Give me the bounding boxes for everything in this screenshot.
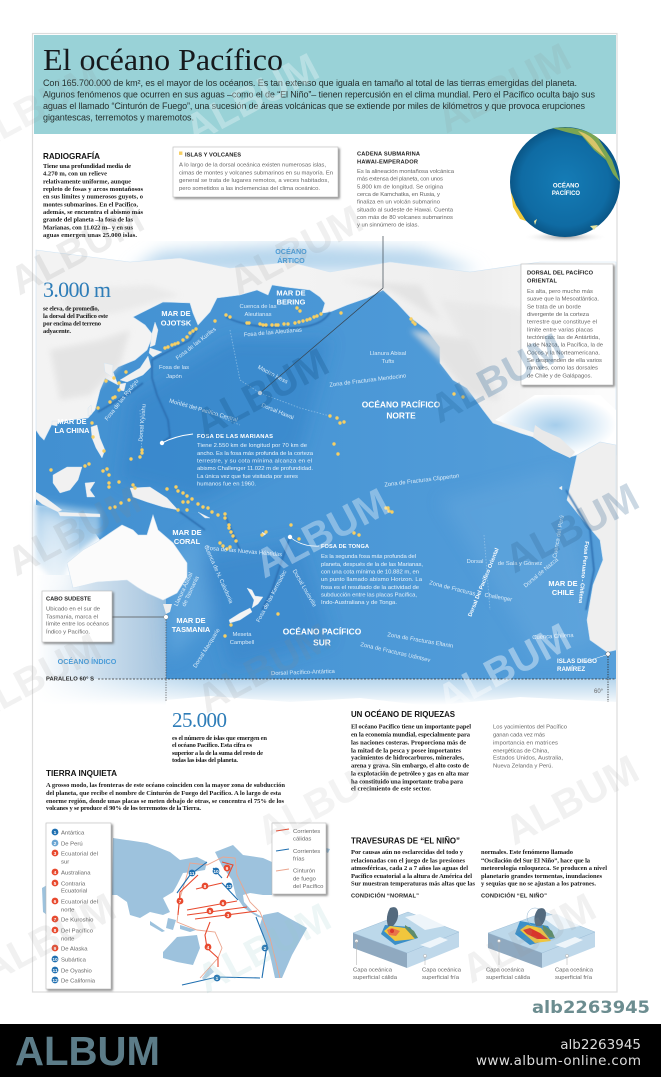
sea and ocean names [54,247,597,673]
text: Travesuras de El Niño: Por causas aún no esclarecidas del todo y [351,849,464,856]
album watermarks: ALBUM [248,480,396,587]
cold currents [177,862,267,985]
diagram: condición normal [351,892,462,981]
callout: Cabo Sudeste: CABO SUDESTE [46,596,91,602]
seabed feature labels: Zona de Fracturas Udintsev [360,642,431,664]
album watermarks: ALBUM [190,895,338,1002]
intro text: Con 165.700.000 de km², es el mayor de los océanos. Es tan extenso que iguala en tamaño al total de las tierras emergidas del planeta. [43,78,577,88]
text: Un océano de riquezas: en la economía mundial, especialmente para [351,731,471,738]
legend: current types: Cinturón [293,868,315,874]
text: Un océano de riquezas: la explotación de petróleo y gas en alta mar [351,770,469,777]
footer logo: ALBUM [15,1028,160,1074]
callout: Fosa de Tonga: FOSA DE TONGA [321,544,369,550]
seabed feature labels: Dorsal Kyushu [138,404,148,442]
stat: 3.000 m [43,277,111,335]
text: Tierra inquieta: TIERRA INQUIETA [46,768,117,778]
legend: current numbers: 4 [54,870,57,876]
callout: Islas y volcanes: pero sometidos a las inclemencias del clima oceánico. [179,186,320,192]
text: Radiografía: repleto de fosas y arcos montañosos [43,186,143,193]
text: Un océano de riquezas: las naciones costeras. Proporciona más de [351,739,466,746]
sea and ocean names: MAR DE [57,417,87,426]
text: Radiografía: Tiene una profundidad media de [43,163,131,170]
stat: 25.000 [172,708,267,764]
stat: 3.000 m: se eleva, de promedio, [43,306,99,312]
seabed feature labels: Llanura Abisal [370,351,406,357]
legend: current types: de fuego [293,876,317,882]
seabed feature labels: de Sala y Gómez [498,561,542,567]
text: Travesuras de El Niño: meteorología enloquezca. Se producen a nivel [481,865,607,872]
text: Un océano de riquezas: UN OCÉANO DE RIQUEZAS [351,709,455,719]
current numbers on map: 7 [179,899,182,905]
text: Un océano de riquezas: yacimientos de hidrocarburos, minerales, [351,754,464,761]
text: Cadena submarina Hawai-Emperador: Es la alineación montañosa volcánica [357,169,455,175]
text: Un océano de riquezas [351,709,568,792]
text: Travesuras de El Niño: Pacífico ecuatorial a la altura de América del [351,873,472,880]
text: Tierra inquieta: del planeta, que recibe el nombre de Cinturón de Fuego del Pacífico. A lo largo de esta [46,790,282,797]
seabed feature labels: Dorsal Louisville [291,569,317,608]
sea and ocean names: NORTE [386,410,416,420]
sea and ocean names: BERING [277,298,306,306]
text: Un océano de riquezas: la mitad de la pesca y posee importantes [351,747,461,754]
text: Un océano de riquezas: Nueva Zelanda y Perú. [493,763,553,769]
callout: Fosa de las Marianas: terrestre, y su cota mínima alcanza en el [197,458,312,464]
islands and land of the west Pacific [36,322,562,536]
text: Travesuras de El Niño: y sequías que no se ajustan a los patrones. [481,880,596,887]
legend: current numbers: 8 [54,928,57,934]
legend: current numbers: 6 [54,899,57,905]
album watermarks: ALBUM [498,475,646,582]
seabed feature labels: Meseta [232,632,252,638]
legend: current numbers: 9 [54,946,57,952]
callout: Islas y volcanes: general se trata de lugares remotos, a veces habitados, [179,178,329,184]
callout: Dorsal del Pacífico Oriental: terrestre que constituye el [527,320,597,326]
current numbers on map: 1 [216,976,219,982]
stat: 25.000: superior a la de la suma del resto de [172,750,263,757]
callout: Dorsal del Pacífico Oriental: ramales, como las dorsales [527,366,598,372]
callout: Islas y volcanes [173,147,338,197]
parallel 60 S marker [46,617,616,702]
stat: 3.000 m: la dorsal del Pacífico este [43,313,108,320]
seabed feature labels: Fosa Peruano - Chilena [577,541,589,604]
seabed feature labels: Fosa de las Kermadec [256,569,288,624]
text: Un océano de riquezas: Los yacimientos del Pacífico [493,724,568,730]
seabed feature labels: Campbell [230,640,254,646]
legend: current types: Corrientes [293,849,320,855]
legend: current numbers: 11 [52,968,58,974]
callout: Dorsal del Pacífico Oriental: Se trata de un borde [527,304,582,310]
text: Cadena submarina Hawai-Emperador: HAWAI-EMPERADOR [357,160,418,166]
footer credits: www.album-online.com [476,1053,641,1069]
diagram: condición El Niño: CONDICIÓN “EL NIÑO” [481,892,547,900]
globe icon: PACÍFICO [552,189,580,197]
diagram: condición El Niño [481,892,595,981]
legend: current numbers: 10 [52,957,58,963]
seabed feature labels: Dorsal Macquarie [193,628,222,669]
sea and ocean names: LA CHINA [54,426,90,435]
New Zealand [229,588,263,623]
sea and ocean names: OJOTSK [161,318,192,328]
text: Un océano de riquezas: El océano Pacífico tiene un importante papel [351,723,471,730]
text: Radiografía: relativamente uniforme, aunque [43,178,131,186]
sea and ocean names: ÁRTICO [277,256,305,265]
parallel 60 S marker: 60° [594,689,604,695]
album watermarks: ALBUM [222,197,370,304]
legend: current types: Corrientes [293,829,320,835]
seabed feature labels: Dorsal [467,559,483,565]
seabed feature labels: de Tasmania [181,575,201,608]
album watermarks: ALBUM [430,35,578,142]
callout: Fosa de las Marianas: FOSA DE LAS MARIANAS [197,434,273,440]
text: Un océano de riquezas: arena y grava. Sin embargo, el alto costo de [351,762,469,769]
stat: 3.000 m: 3.000 m [43,277,111,302]
album watermarks: ALBUM [188,340,336,447]
intro text: Algunos fenómenos que ocurren en sus aguas –como el de “El Niño”– tienen repercusión en el clima mundial. Pero el Pacífico oculta bajo sus [43,90,596,100]
text: Radiografía: aguas emergen unas 25.000 islas. [43,232,137,239]
callout: Cabo Sudeste: Ubicado en el sur de [46,606,101,612]
text: Un océano de riquezas: energéticas de China, [493,748,549,754]
diagram: condición normal: superficial fría [422,975,460,981]
text: Cadena submarina Hawai-Emperador: con más de 80 volcanes submarinos [357,215,453,221]
text: Radiografía [43,150,143,239]
ocean trenches [98,312,594,610]
parallel 60 S marker: PARALELO 60° S [46,676,94,682]
callout: Dorsal del Pacífico Oriental: suave que la Mesoatlántica. [527,296,599,302]
callout: Cabo Sudeste: límite entre los océanos [46,622,109,628]
seabed feature labels: Fosa de las Ryukyu [104,378,140,422]
callout: Dorsal del Pacífico Oriental [521,264,613,385]
callout: Dorsal del Pacífico Oriental: Cocos y la Norteamericana. [527,350,600,356]
text: Cadena submarina Hawai-Emperador [357,152,455,228]
legend: current types: del Pacífico [293,884,324,890]
text: Travesuras de El Niño: relacionadas con el juego de las presiones [351,857,465,864]
callout: Cabo Sudeste [42,591,168,642]
sea and ocean names: MAR DE [172,528,202,537]
yellow dots: islands and volcanoes [49,306,465,638]
text: Travesuras de El Niño: “Oscilación del Sur El Niño”, hace que la [481,857,591,864]
sea and ocean names: ISLAS DIEGO [557,658,597,665]
seabed feature labels: Tufts [382,359,394,365]
sea and ocean names: MAR DE [161,309,191,318]
seabed feature labels: Dorsal Hawai [260,403,294,421]
current numbers on map: 8 [204,884,207,890]
callout: Dorsal del Pacífico Oriental: de Chile y de Galápagos. [527,374,592,380]
album watermarks: ALBUM [0,478,148,585]
current numbers on map: 12 [226,884,232,890]
sea and ocean names: RAMÍREZ [557,665,585,673]
text: Radiografía: Marianas, con 11.022 m– y en sus [43,224,133,232]
diagram: condición normal: Capa oceánica [353,968,393,974]
text: Un océano de riquezas: el crecimiento de este sector. [351,785,431,792]
stat: 25.000: es el número de islas que emergen en [172,735,267,742]
diagram: condición normal: CONDICIÓN “NORMAL” [351,892,419,900]
intro text: aguas el llamado “Cinturón de Fuego”, una sucesión de áreas volcánicas que se extiende por miles de kilómetros y que provoca erupciones [43,101,586,111]
callout: Fosa de las Marianas [160,434,314,488]
current numbers on map: 5 [209,909,212,915]
current numbers on map: 3 [227,913,230,919]
current numbers on map: 10 [213,869,219,875]
sea and ocean names: MAR DE [548,579,578,588]
legend: current numbers: Ecuatorial [61,888,87,894]
seabed feature labels: Fosa de las Aleutianas [244,327,302,339]
seabed feature labels [104,304,589,677]
footer credits: alb2263945 [560,1037,641,1053]
seabed feature labels: Macizo Hess [256,365,289,386]
seabed feature labels: Fosa de las Nuevas Hébridas [206,546,282,558]
legend: current numbers: 12 [52,978,58,984]
diagram: condición El Niño: superficial fría [555,975,593,981]
ring of fire [177,857,280,978]
legend: current numbers: 1 [54,830,57,836]
Australia [67,515,187,600]
callout: Dorsal del Pacífico Oriental: la de Nazca, la Pacífica, la de [527,342,604,348]
stat: 3.000 m: adyacente. [43,328,71,335]
text: Cadena submarina Hawai-Emperador: y un sinnúmero de islas. [357,222,419,228]
callout: Fosa de Tonga [288,535,423,606]
seabed feature labels: Montes del Pacífico Central [168,398,238,424]
text: Un océano de riquezas: ganan cada vez más [493,732,545,738]
text: Un océano de riquezas: importancia en matrices [493,740,558,746]
album watermarks: ALBUM [250,747,398,854]
text: Radiografía: RADIOGRAFÍA [43,150,100,161]
legend: current numbers [46,823,111,989]
sea and ocean names: OCÉANO ÍNDICO [58,657,117,666]
title: El océano Pacífico [43,42,283,77]
sea and ocean names: OCÉANO [275,247,307,256]
text: Un océano de riquezas: Estados Unidos, Australia, [493,755,563,761]
callout: Cabo Sudeste: Índico y Pacífico. [46,628,90,636]
diagram: condición normal: superficial cálida [353,975,398,981]
sea and ocean names: OCÉANO PACÍFICO [362,398,441,410]
continents [42,838,330,980]
footer bar [0,1024,661,1077]
text: Travesuras de El Niño: normales. Este fenómeno llamado [481,849,573,856]
map of the Pacific Ocean [36,244,616,710]
legend: current numbers: De Kuroshio [61,918,94,924]
callout: Dorsal del Pacífico Oriental: tectónicas: las de Antártida, [527,335,600,341]
current numbers on map: 9 [226,866,229,872]
text: Cadena submarina Hawai-Emperador: 5.800 km de longitud. Se origina [357,184,444,190]
callout: Islas y volcanes: cimas de montes y volcanes submarinos en su mayoría. En [179,170,333,176]
callout: Fosa de Tonga: subducción entre las placas Pacífica, [321,592,417,598]
legend: current types: frías [293,856,305,862]
ocean shading [120,340,600,670]
text: Radiografía: grande del planeta –la fosa de las [43,216,133,224]
legend: current numbers: 3 [54,851,57,857]
legend: current numbers: De Perú [61,842,83,848]
current numbers on map [177,865,268,982]
callout: Fosa de las Marianas: ancho. Es la fosa más profunda de la corteza [197,451,314,457]
legend: current numbers: norte [61,908,75,914]
callout: Fosa de Tonga: con una cota mínima de 10.882 m, en [321,570,419,576]
image code: alb2263945 [532,998,650,1018]
current numbers on map: 11 [189,871,195,877]
seabed feature labels: Dorsal Del Pacífico Oriental [468,547,501,618]
callout: Dorsal del Pacífico Oriental: Se desprenden de ella varios [527,358,602,364]
legend: current numbers: norte [61,936,75,942]
callout: Dorsal del Pacífico Oriental: Es alta, pero mucho más [527,289,593,295]
legend: current numbers: Del Pacífico [61,928,94,934]
seabed feature labels: Challenger [484,593,513,603]
callout: Fosa de Tonga: Es la segunda fosa más profunda del [321,554,416,560]
legend: current numbers: Contraria [61,882,86,888]
legend: current numbers: De California [61,978,96,984]
legend: current numbers: 5 [54,881,57,887]
callout: Fosa de las Marianas: humanos fue en 1960. [197,482,256,488]
sea and ocean names: CHILE [552,588,574,597]
legend: current types: cálidas [293,836,311,842]
callout: Islas y volcanes: ISLAS Y VOLCANES [185,152,241,158]
sea and ocean names: SUR [313,638,331,648]
seabed feature labels: Fosa de las [159,365,189,371]
text: Travesuras de El Niño [351,836,607,887]
seabed feature labels: Cuenca Chilena [532,633,574,641]
album watermarks: ALBUM [3,197,151,304]
globe icon: OCÉANO [553,182,579,190]
callout: Fosa de las Marianas: abismo Challenger 11.022 m de profundidad. [197,466,313,472]
text: Cadena submarina Hawai-Emperador: situado al sudeste de Hawai. Cuenta [357,208,454,214]
footer credits [476,1037,641,1069]
diagram: condición El Niño: Capa oceánica [486,968,525,974]
album watermarks: ALBUM [430,615,578,722]
seabed feature labels: Zona de Fracturas Eltanin [387,632,454,650]
legend: current types [272,823,326,894]
diagram: condición El Niño: superficial cálida [486,975,531,981]
callout: Dorsal del Pacífico Oriental: límite entre varias placas [527,328,593,334]
seabed feature labels: Aleutianas [244,312,272,318]
callout: Fosa de Tonga: un punto llamado abismo Horizon. La [321,577,423,583]
globe icon [510,127,620,243]
sea and ocean names: CORAL [174,537,201,546]
text: Tierra inquieta [46,768,285,812]
text: Travesuras de El Niño: planetario grandes tormentas, inundaciones [481,873,602,880]
northern land masses [36,250,616,457]
text: Radiografía: 4.270 m, con un relieve [43,170,107,178]
current numbers on map: 4 [207,945,210,951]
diagram: condición normal: Capa oceánica [422,968,462,974]
leader line to Hawaii [258,236,383,395]
seabed feature labels: Fosa de las Kuriles [175,327,218,362]
album watermarks: ALBUM [455,885,603,992]
sea and ocean names: TASMANIA [172,625,211,634]
text: Travesuras de El Niño: Sur muestran temperaturas más altas que las [351,880,475,887]
South America [567,442,616,652]
seabed feature labels: Llanura Abisal [174,572,195,607]
album watermarks: ALBUM [498,747,646,854]
header band [34,35,616,134]
text: Travesuras de El Niño: atmosféricas, cada 2 a 7 años las aguas del [351,865,468,872]
callout: Fosa de Tonga: planeta, después de la de las Marianas, [321,562,423,568]
sea and ocean names: MAR DE [276,288,306,298]
Caribbean glow [495,395,616,455]
Central America [533,425,575,458]
seabed feature labels: Dorsal de Nazca [523,557,560,589]
seabed feature labels: Dorsal Pacífico-Antártica [271,669,336,677]
text: Cadena submarina Hawai-Emperador: CADENA SUBMARINA [357,152,420,158]
text: Radiografía: montes submarinos. En el Pacífico, [43,202,138,208]
sea and ocean names: MAR DE [176,616,206,625]
legend: current numbers: sur [61,860,69,866]
callout: Fosa de las Marianas: La única vez que fue visitada por seres [197,474,298,480]
callout: Fosa de las Marianas: Tiene 2.550 km de longitud por 70 km de [197,443,308,449]
text: Radiografía: además, se encuentra el abismo más [43,209,143,216]
text: Tierra inquieta: A grosso modo, las fronteras de este océano coinciden con la mayor zona de subducción [46,782,285,789]
text: Tierra inquieta: enorme región, donde unas placas se meten debajo de otras, se concentra el 75% de los [46,798,284,805]
intro text: gigantescas, terremotos y maremotos. [43,112,194,122]
text: Cadena submarina Hawai-Emperador: finaliza en un volcán submarino [357,200,441,206]
chart: map of Pacific currents [42,838,330,985]
text: Radiografía: en sus límites y numerosos guyots, o [43,194,143,200]
album watermarks: ALBUM [190,615,338,722]
callout: Fosa de Tonga: Indo-Australiana y de Tonga. [321,600,397,606]
seabed feature labels: Cuenca de las [239,304,277,310]
land shading [50,280,530,400]
callout: Dorsal del Pacífico Oriental: divergente de la corteza [527,312,590,318]
legend: current numbers: Antártica [61,830,85,836]
legend: current numbers: Ecuatorial del [61,852,98,858]
callout: Dorsal del Pacífico Oriental: ORIENTAL [527,278,558,284]
legend: current numbers: Subártica [61,958,87,964]
stat: 25.000: todas las islas del planeta. [172,757,238,764]
sea and ocean names: OCÉANO PACÍFICO [283,626,362,636]
seabed feature labels: Japón [166,374,182,380]
legend: current numbers: 2 [54,841,57,847]
legend: current numbers: 7 [54,917,57,923]
stat: 3.000 m: por encima del terreno [43,320,101,328]
seabed feature labels: Cuenca de N. Caledonia [202,545,234,605]
text: Travesuras de El Niño: TRAVESURAS DE “EL NIÑO” [351,836,460,846]
text: Cadena submarina Hawai-Emperador: cerca de Kamchatka, en Rusia, y [357,192,440,198]
stat: 25.000: el océano Pacífico. Esta cifra es [172,742,252,749]
seabed feature labels: Zona de Fracturas [429,580,476,598]
legend: current numbers: De Oyashio [61,968,93,974]
current numbers on map: 6 [222,901,225,907]
legend: current numbers: De Alaska [61,946,88,952]
text: Tierra inquieta: volcanes y se produce el 90% de los terremotos de la Tierra. [46,805,201,812]
text: Cadena submarina Hawai-Emperador: más extensa del planeta, con unos [357,176,443,182]
album watermarks: ALBUM [178,45,326,152]
callout: Dorsal del Pacífico Oriental: DORSAL DEL PACÍFICO [527,268,594,276]
callout: Islas y volcanes: A lo largo de la dorsal oceánica existen numerosas islas, [179,162,326,168]
callout: Fosa de Tonga: fosa es el resultado de la actividad de [321,585,420,591]
current numbers on map: 2 [264,946,267,952]
text: Un océano de riquezas: ha constituido una importante traba para [351,778,464,785]
callout: Cabo Sudeste: Tasmania, marca el [46,614,98,620]
seabed feature labels: Cuenca del Perú [552,515,566,559]
warm currents [178,862,257,967]
intro text [43,78,596,122]
legend: current numbers: Ecuatorial del [61,900,98,906]
album watermarks: ALBUM [423,325,571,432]
seabed feature labels: Zona de Fracturas Mendocino [329,373,407,389]
seabed feature labels: Zona de Fracturas Clipperton [384,473,460,489]
legend: current numbers: Australiana [61,870,91,876]
stat: 25.000: 25.000 [172,708,227,732]
diagram: condición El Niño: Capa oceánica [555,968,594,974]
